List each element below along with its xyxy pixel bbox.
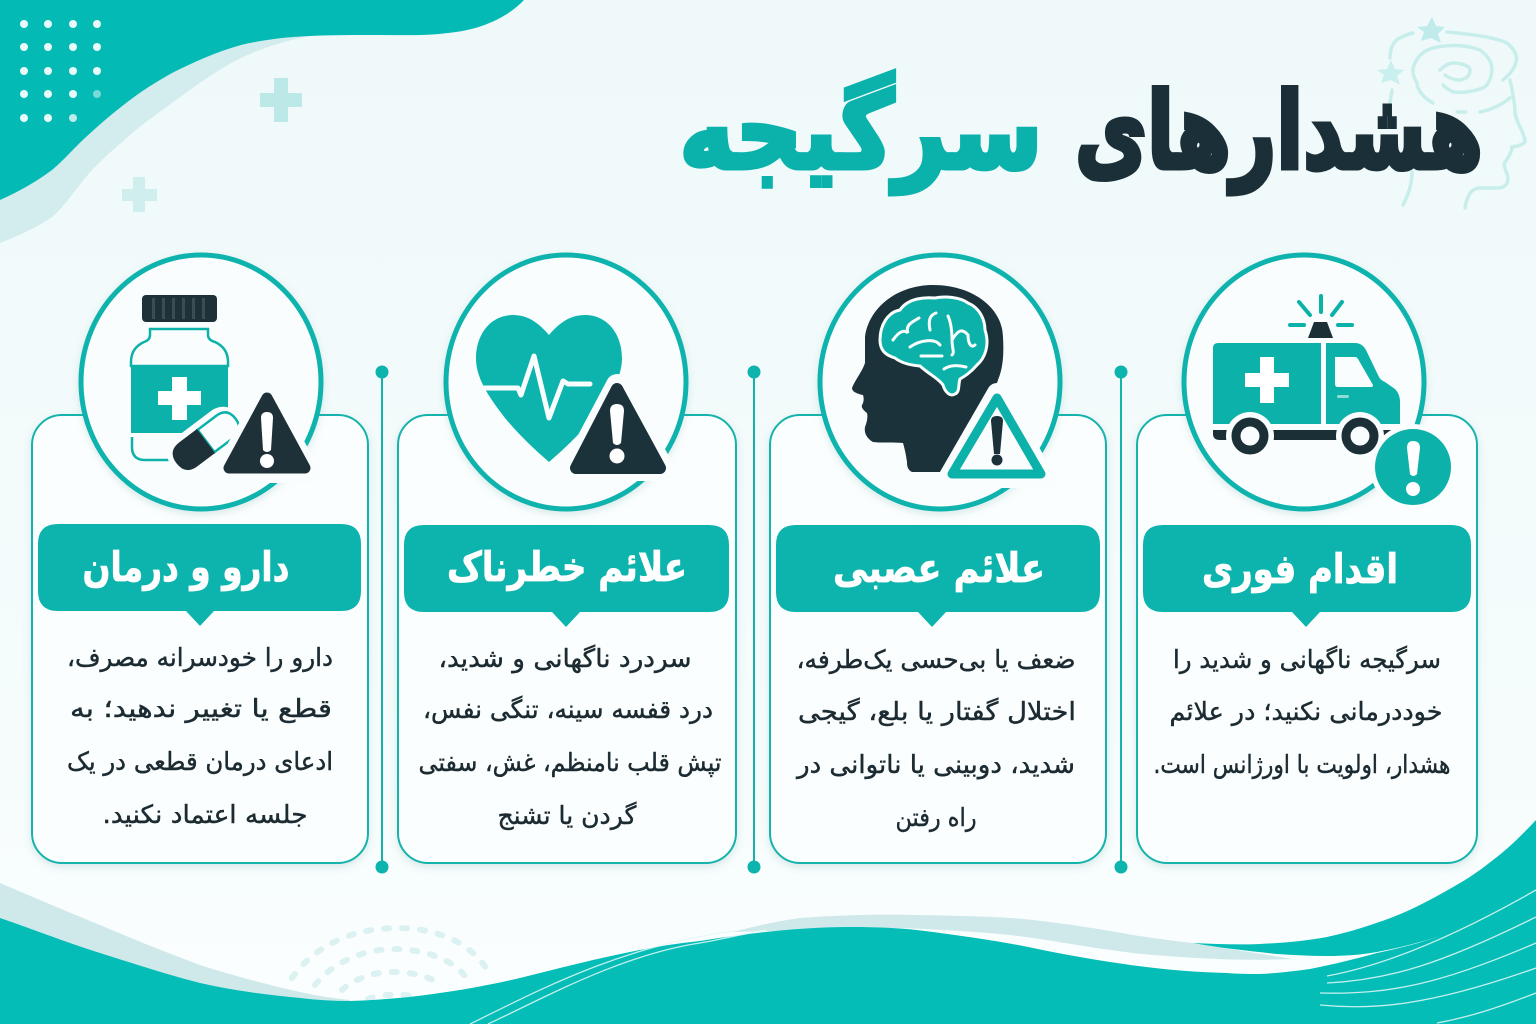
body text: سرگیجه ناگهانی و شدید را: [1173, 645, 1441, 675]
heading ribbon: اقدام فوری: [1202, 545, 1398, 594]
heading ribbon: علائم خطرناک: [447, 543, 687, 591]
icon: pill bottle with capsule and warning: [131, 295, 310, 484]
body text: [795, 645, 1076, 832]
body text: دارو را خودسرانه مصرف،: [67, 643, 333, 673]
body text: درد قفسه سینه، تنگی نفس،: [423, 695, 713, 724]
icon: alert badge: [1370, 424, 1456, 510]
heading ribbon: دارو و درمان: [82, 543, 290, 592]
body text: سردرد ناگهانی و شدید،: [438, 644, 692, 674]
background head with dizzy swirl icon: [1377, 17, 1525, 208]
panel: dangerous signs: [398, 255, 736, 863]
body text: [1154, 645, 1450, 780]
plus decoration small: [122, 177, 157, 212]
body text: ضعف یا بی‌حسی یک‌طرفه،: [796, 645, 1076, 674]
body text: هشدار، اولویت با اورژانس است.: [1154, 750, 1450, 780]
panel: medication and treatment: [32, 255, 368, 863]
dotted arcs decoration: [292, 928, 490, 999]
heading ribbon: [1143, 525, 1471, 627]
body text: راه رفتن: [896, 803, 976, 832]
body text: گردن یا تشنج: [498, 801, 637, 831]
body text: تپش قلب نامنظم، غش، سفتی: [418, 748, 722, 778]
bottom wave decoration: [0, 820, 1536, 1024]
divider right: [1114, 366, 1128, 874]
top-left wave decoration: [0, 0, 524, 243]
heading ribbon: علائم عصبی: [833, 544, 1045, 592]
divider left: [376, 366, 388, 874]
body text: قطع یا تغییر ندهید؛ به: [70, 694, 332, 724]
panel: neurological signs: [770, 255, 1106, 863]
panel: immediate action: [1137, 255, 1477, 863]
plus decoration large: [260, 78, 302, 122]
title: [680, 70, 1483, 194]
icon ring: head: [820, 255, 1060, 509]
dot grid: [20, 20, 101, 122]
heading ribbon: [404, 525, 729, 627]
divider middle: [748, 366, 760, 874]
body text: [418, 644, 722, 831]
body text: اختلال گفتار یا بلع، گیجی: [798, 697, 1076, 727]
title: سرگیجه: [680, 70, 1042, 194]
icon ring: medicine: [81, 255, 321, 509]
body text: ادعای درمان قطعی در یک: [67, 747, 333, 776]
icon: ambulance: [1213, 296, 1400, 460]
icon: head with brain: [852, 285, 1045, 478]
heading ribbon: [38, 524, 361, 626]
body text: شدید، دوبینی یا ناتوانی در: [795, 750, 1075, 780]
body text: [67, 643, 333, 829]
heading ribbon: [776, 525, 1100, 627]
icon ring: heart: [446, 255, 686, 509]
body text: جلسه اعتماد نکنید.: [102, 800, 308, 829]
body text: خوددرمانی نکنید؛ در علائم: [1170, 697, 1442, 727]
icon: heart with warning: [476, 315, 664, 470]
icon ring: ambulance: [1184, 255, 1424, 509]
